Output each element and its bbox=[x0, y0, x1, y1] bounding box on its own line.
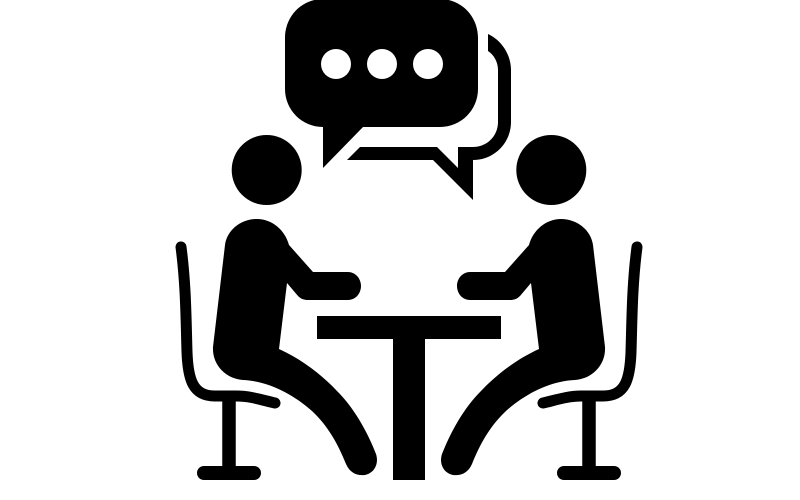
icon: back speech bubble outline bbox=[347, 34, 511, 200]
icon: left person head bbox=[232, 135, 302, 205]
icon: left chair bbox=[181, 247, 275, 473]
icon: right person body bbox=[441, 219, 605, 475]
icon: front speech bubble bbox=[285, 0, 478, 168]
icon: table bbox=[317, 316, 501, 480]
icon: right chair bbox=[543, 247, 637, 473]
icon: right person head bbox=[516, 135, 586, 205]
icon: left person body bbox=[213, 219, 377, 475]
